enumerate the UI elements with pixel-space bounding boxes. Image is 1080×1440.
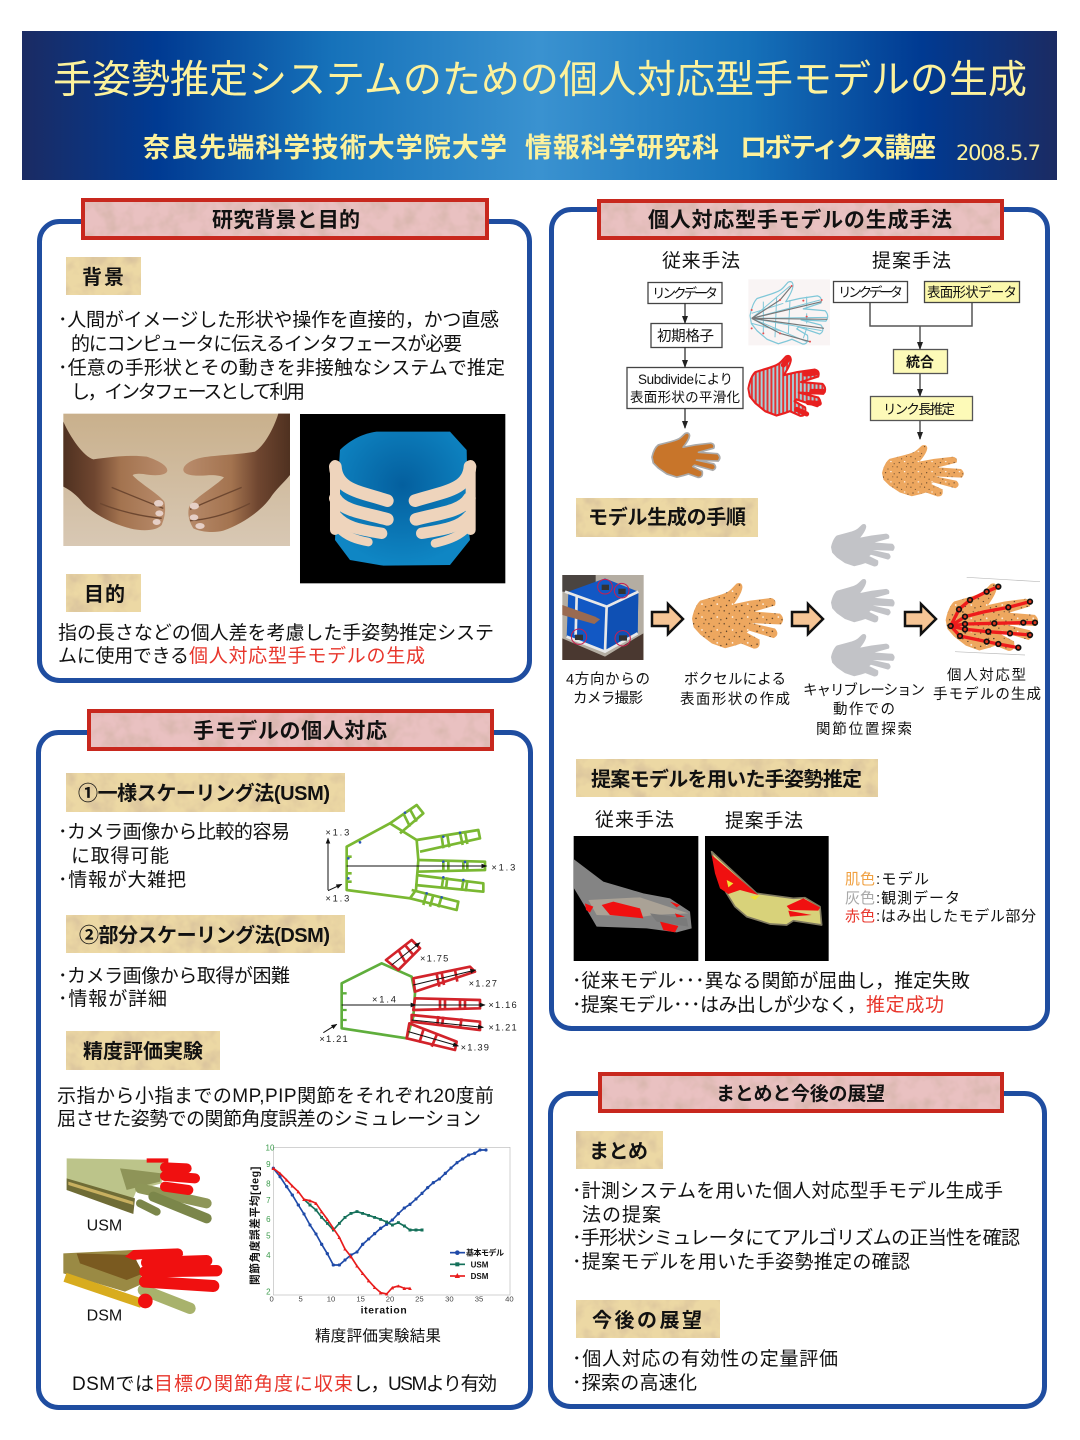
subheading: future work [576,1300,720,1338]
USM text: ･情報が大雑把 [58,869,186,891]
chart legend: DSM [471,1272,489,1281]
y axis labels: 5 [266,1232,271,1241]
subheading: pose estimation: 提案モデルを用いた手姿勢推定 [591,767,862,791]
subheading: DSM [66,915,345,953]
arrow [652,604,683,634]
subheading: model generation steps: モデル生成の手順 [588,505,746,529]
caption: calibration [803,681,925,738]
chart legend: 基本モデル [466,1248,504,1258]
caption: camera: 4方向からの [566,671,650,688]
colour legend: 肌色 [845,871,875,888]
chart legend: USM [471,1261,489,1270]
flow: proposed method: 表面形状データ [927,284,1017,300]
flow: conventional method: Subdivideにより [638,372,733,387]
x axis labels: 20 [386,1295,394,1304]
affiliation: ロボティクス講座 [740,133,936,163]
future work text: ･探索の高速化 [572,1372,697,1394]
caption: voxel: ボクセルによる [684,671,786,688]
estimation results text: 推定成功 [866,994,944,1016]
diagram: uniform scaling hand: ×1.3 [325,827,349,837]
heading: personalised hand model: 手モデルの個人対応 [193,719,387,743]
DSM text: ･情報が詳細 [58,988,167,1010]
caption: voxel [680,671,790,708]
line chart: joint angle error [249,1143,514,1316]
colour legend [845,870,1036,925]
panel: research background and purpose [40,198,530,680]
series: DSM [273,1168,410,1294]
colour legend: :観測データ [876,889,960,907]
y axis labels: 10 [266,1143,275,1152]
y axis labels: 8 [266,1179,271,1188]
future work text: ･個人対応の有効性の定量評価 [572,1348,838,1370]
caption: voxel: 表面形状の作成 [680,691,790,708]
y axis labels: 9 [266,1160,271,1169]
colour legend: :モデル [876,870,929,888]
conventional method label: 従来手法 [662,250,740,272]
heading: generation method [597,199,1004,240]
diagram: uniform scaling hand [325,805,515,910]
photo: hands [63,414,290,546]
USM text: に取得可能 [71,845,169,867]
background text: 的にコンピュータに伝えるインタフェースが必要 [71,333,462,355]
caption: personalised model: 個人対応型 [947,667,1026,684]
heading: summary and outlook [598,1072,1004,1113]
image: brown hand [652,433,720,477]
experiment description: 屈させた姿勢での関節角度誤差のシミュレーション [57,1108,481,1130]
purpose text: ムに使用できる [58,645,189,667]
proposed method label: 提案手法 [872,250,951,272]
estimation results text: ･提案モデル･･･はみ出しが少なく， [572,994,866,1016]
image: USM result: USM [87,1218,122,1235]
panel: personalised hand model [38,709,530,1408]
DSM text: ･カメラ画像から取得が困難 [58,965,290,987]
panel: summary and future work [550,1072,1044,1406]
image: USM result [67,1158,207,1235]
flow: proposed method: 統合 [906,354,934,370]
series: USM [304,1199,422,1230]
summary text: ･手形状シミュレータにてアルゴリズムの正当性を確認 [572,1227,1020,1249]
subheading: accuracy experiment: 精度評価実験 [83,1040,203,1063]
USM text [58,821,290,891]
diagram: uniform scaling hand: ×1.3 [325,894,349,904]
title: 手姿勢推定システムのための個人対応型手モデルの生成 [53,59,1027,102]
image: personalised hand with skeleton [946,577,1040,655]
flow: proposed method: リンクデータ [838,284,903,300]
affiliation: 奈良先端科学技術大学院大学 [143,133,507,163]
summary text: ･提案モデルを用いた手姿勢推定の確認 [572,1251,910,1273]
subheading: pose estimation [576,759,878,797]
USM text: ･カメラ画像から比較的容易 [58,821,290,843]
summary text: 法の提案 [582,1204,661,1226]
purpose text [58,622,494,667]
proposed label: 提案手法 [725,810,803,832]
x axis labels: 25 [415,1295,424,1304]
x axis labels: 0 [270,1295,274,1304]
diagram: partial scaling hand [319,940,517,1053]
chart caption: 精度評価実験結果 [315,1327,441,1345]
subheading: accuracy experiment [66,1031,220,1070]
heading: research background: 研究背景と目的 [212,209,360,232]
subheading: background: 背景 [82,266,124,289]
date: 2008.5.7 [956,141,1041,165]
heading: summary and outlook: まとめと今後の展望 [716,1083,885,1105]
background text: し，インタフェースとして利用 [71,381,305,403]
colour legend: 灰色 [845,890,875,907]
x axis labels [270,1295,514,1304]
estimation results text: ･従来モデル･･･異なる関節が屈曲し，推定失敗 [572,970,970,992]
image: conventional estimation [574,836,698,961]
background text [58,309,505,403]
y axis labels: 6 [266,1215,271,1224]
flow: conventional method: リンクデータ [652,285,718,301]
x axis labels: 5 [299,1295,303,1304]
subheading: summary [576,1131,663,1169]
summary text [572,1180,1020,1273]
caption: camera [566,671,650,707]
image: cyan mesh hand [748,279,830,345]
subheading: purpose: 目的 [84,583,125,606]
header banner [22,31,1057,180]
colour legend: :はみ出したモデル部分 [876,907,1036,925]
diagram: partial scaling hand: ×1.21 [488,1023,517,1033]
affiliation [143,133,936,163]
heading: personalised hand model [87,709,494,751]
flow: proposed method [834,282,1020,439]
estimation results text [572,970,970,1016]
image: orange voxel hand (proposed) [882,445,964,497]
future work text [572,1348,838,1394]
image: DSM result [63,1248,217,1325]
flow: proposed method: リンク長推定 [883,402,955,417]
y axis labels: 4 [266,1251,271,1260]
background text: ･任意の手形状とその動きを非接触なシステムで推定 [58,357,505,379]
caption: personalised model: 手モデルの生成 [933,685,1041,703]
experiment description: 示指から小指までのMP,PIP関節をそれぞれ20度前 [57,1085,494,1107]
conclusion line: 目標の関節角度に収束 [154,1373,353,1395]
subheading: purpose [66,574,141,612]
conclusion line: し，USMより有効 [353,1373,497,1395]
diagram: uniform scaling hand: ×1.3 [491,863,515,873]
diagram: partial scaling hand: ×1.4 [372,995,396,1005]
flow: conventional method: 表面形状の平滑化 [630,390,740,405]
image: DSM result: DSM [87,1308,122,1325]
conclusion line [72,1373,497,1395]
caption: camera: カメラ撮影 [573,690,644,707]
x axis labels: 30 [445,1295,454,1304]
subheading: future work: 今後の展望 [592,1309,702,1332]
photo: camera rig [562,575,644,660]
x axis labels: 15 [356,1295,365,1304]
purpose text: 指の長さなどの個人差を考慮した手姿勢推定システ [58,622,494,644]
subheading: model generation steps [576,498,758,537]
series: base model [273,1150,486,1265]
caption: calibration: キャリブレーション [803,681,925,699]
heading: generation method: 個人対応型手モデルの生成手法 [648,208,952,232]
subheading: background [66,257,141,295]
arrow [905,604,936,634]
diagram: partial scaling hand: ×1.27 [469,979,497,989]
image: voxel hand [692,583,783,649]
diagram: partial scaling hand: ×1.16 [488,1000,517,1010]
heading: research background [81,198,489,240]
panel: generation method [552,199,1048,1028]
caption: calibration: 動作での [833,701,895,718]
subheading: summary: まとめ [589,1141,648,1163]
x axis labels: 35 [475,1295,483,1304]
x axis labels: 40 [505,1295,514,1304]
image: hand grasping blue model [300,414,505,583]
caption: personalised model [933,667,1041,703]
affiliation: 情報科学研究科 [525,133,719,163]
y axis labels [266,1143,275,1297]
conclusion line: DSMでは [72,1374,154,1395]
conventional label: 従来手法 [595,809,674,831]
summary text: ･計測システムを用いた個人対応型手モデル生成手 [572,1180,1003,1202]
subheading: USM: ①一様スケーリング法(USM) [78,781,330,805]
y axis title: 関節角度誤差平均[deg] [249,1167,262,1285]
diagram: partial scaling hand: ×1.39 [461,1043,489,1053]
x axis labels: 10 [327,1295,335,1304]
subheading: USM [66,773,345,812]
images: calibration gray hands [831,524,895,676]
purpose text: 個人対応型手モデルの生成 [189,645,425,667]
colour legend: 赤色 [845,908,875,925]
y axis labels: 2 [266,1288,271,1297]
flow: conventional method: 初期格子 [657,328,714,345]
flow: conventional method [627,282,743,428]
image: red subdivided hand [748,356,825,416]
diagram: partial scaling hand: ×1.21 [319,1034,348,1044]
arrow [792,604,823,634]
x axis title: iteration [361,1305,407,1316]
image: proposed estimation [705,836,829,961]
DSM text [58,965,290,1010]
diagram: partial scaling hand: ×1.75 [420,953,448,963]
subheading: DSM: ②部分スケーリング法(DSM) [79,923,330,947]
experiment description [57,1085,494,1130]
chart legend [450,1248,504,1281]
caption: calibration: 関節位置探索 [816,721,912,738]
background text: ･人間がイメージした形状や操作を直接的，かつ直感 [58,309,499,331]
y axis labels: 7 [266,1196,271,1205]
